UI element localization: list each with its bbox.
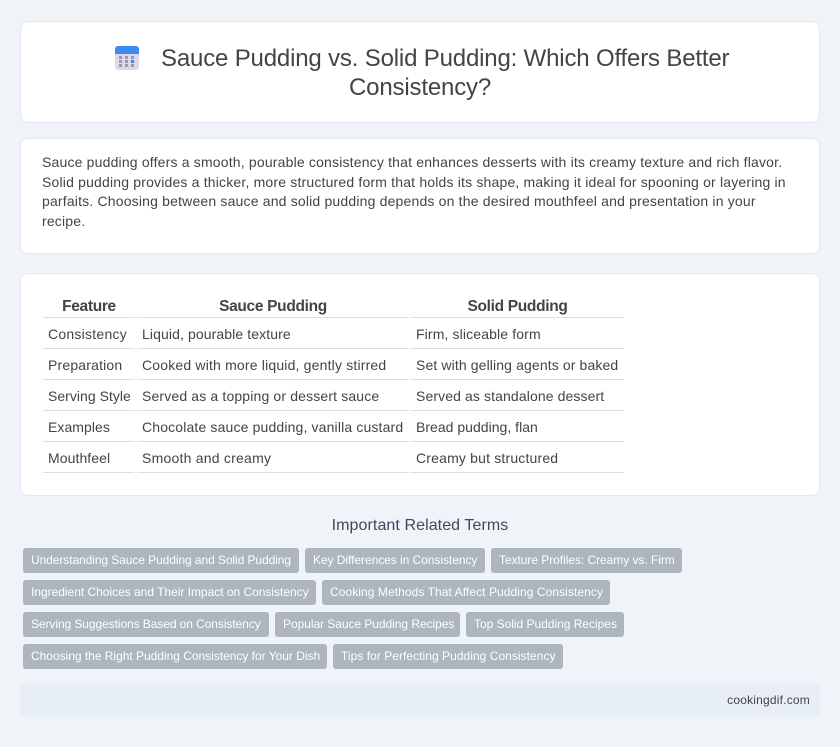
tag list: Serving Suggestions Based on Consistency <box>31 617 261 631</box>
table rows: Preparation <box>48 357 122 373</box>
table rows: Cooked with more liquid, gently stirred <box>142 357 386 373</box>
intro text: Solid pudding provides a thicker, more structured form that holds its shape, making it ideal for spooning or layering in <box>42 174 786 190</box>
tag list: Choosing the Right Pudding Consistency for Your Dish <box>31 649 320 663</box>
intro text <box>20 138 820 254</box>
table rows: Examples <box>48 419 110 435</box>
table rows: Sauce Pudding <box>219 298 327 315</box>
footer source: cookingdif.com <box>727 693 810 707</box>
intro text: Sauce pudding offers a smooth, pourable consistency that enhances desserts with its creamy texture and rich flavor. <box>42 154 782 170</box>
table rows: Solid Pudding <box>467 298 568 315</box>
title <box>161 45 730 101</box>
table rows: Bread pudding, flan <box>416 419 538 435</box>
heading: related terms: Important Related Terms <box>332 517 508 534</box>
table rows: Feature <box>62 298 116 315</box>
tag list <box>23 548 682 669</box>
header panel <box>20 21 820 123</box>
tag list: Texture Profiles: Creamy vs. Firm <box>499 553 675 567</box>
table rows: Serving Style <box>48 388 131 404</box>
title: Consistency? <box>349 74 491 101</box>
panel: comparison table <box>20 273 820 496</box>
table rows: Creamy but structured <box>416 450 558 466</box>
tag list: Popular Sauce Pudding Recipes <box>283 617 454 631</box>
footer bar <box>20 683 820 717</box>
tag list: Top Solid Pudding Recipes <box>474 617 617 631</box>
table rows: Served as standalone dessert <box>416 388 604 404</box>
title: Sauce Pudding vs. Solid Pudding: Which Offers Better <box>161 45 729 72</box>
table rows: Chocolate sauce pudding, vanilla custard <box>142 419 403 435</box>
tag list: Cooking Methods That Affect Pudding Consistency <box>330 585 603 599</box>
tag list: Key Differences in Consistency <box>313 553 477 567</box>
table rows: Mouthfeel <box>48 450 110 466</box>
tag list: Ingredient Choices and Their Impact on Consistency <box>31 585 309 599</box>
tag list: Tips for Perfecting Pudding Consistency <box>341 649 556 663</box>
table rows: Smooth and creamy <box>142 450 271 466</box>
table rows: Set with gelling agents or baked <box>416 357 618 373</box>
icon: calendar <box>115 46 139 70</box>
table rows: Firm, sliceable form <box>416 326 541 342</box>
table rows: Liquid, pourable texture <box>142 326 291 342</box>
tag list: Understanding Sauce Pudding and Solid Pudding <box>31 553 291 567</box>
table rows: Served as a topping or dessert sauce <box>142 388 379 404</box>
table rows: Consistency <box>48 326 127 342</box>
table <box>43 298 624 473</box>
intro text: recipe. <box>42 213 85 229</box>
intro text: parfaits. Choosing between sauce and solid pudding depends on the desired mouthfeel and presentation in your <box>42 193 756 209</box>
